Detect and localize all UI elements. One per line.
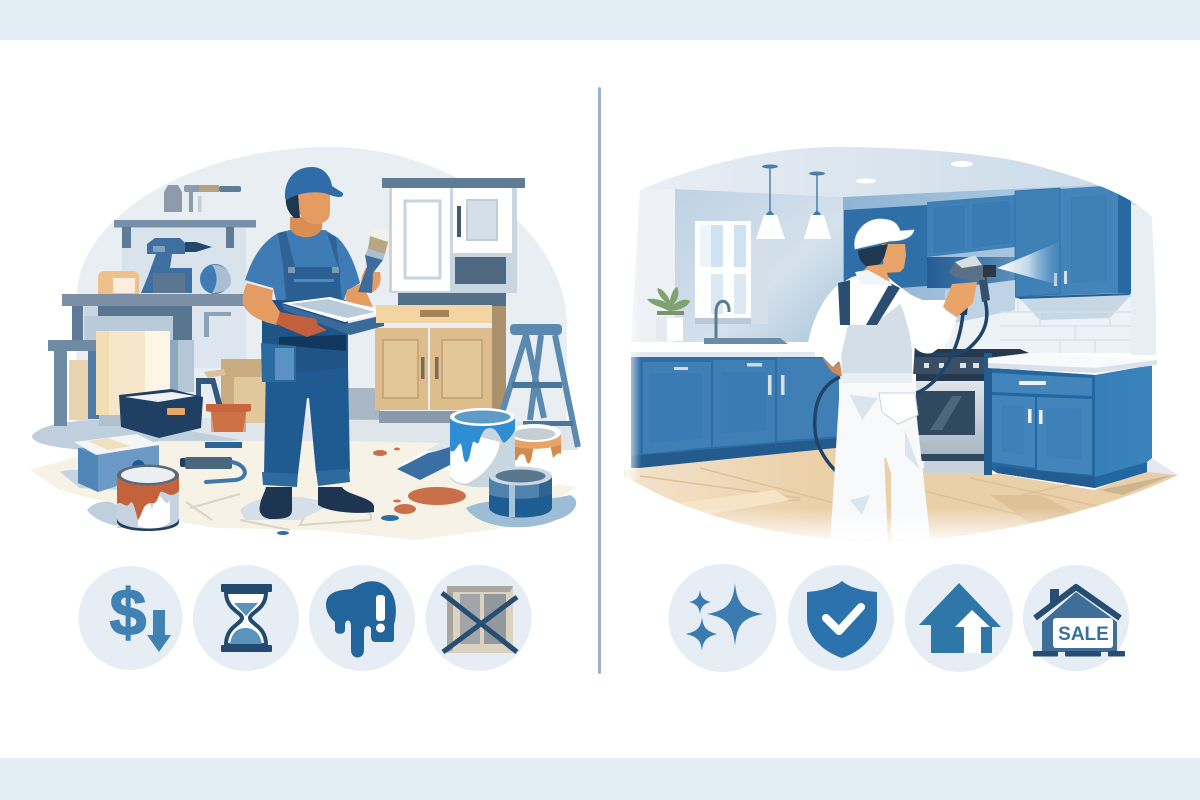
floor paper sheets bbox=[30, 441, 576, 540]
painter legs bbox=[830, 400, 930, 541]
roller and stick bbox=[180, 442, 245, 482]
icon: house for sale bbox=[1023, 565, 1129, 671]
right countertop bbox=[988, 353, 1157, 373]
tan lower cabinet bbox=[375, 305, 506, 423]
floor scraper bbox=[397, 447, 450, 480]
wall base trim bbox=[1147, 458, 1175, 475]
stove and oven bbox=[913, 349, 1029, 475]
pants shading bbox=[850, 395, 920, 515]
icon: house for sale: SALE bbox=[1058, 624, 1109, 645]
left arm bbox=[808, 277, 852, 367]
bib panel bbox=[840, 300, 912, 373]
shelf with drill bbox=[98, 220, 256, 294]
bottom band bbox=[0, 758, 1200, 800]
plant bbox=[647, 287, 690, 341]
backsplash tiles bbox=[945, 205, 1156, 355]
center divider bbox=[598, 87, 601, 674]
icon: shield check bbox=[788, 565, 894, 671]
spray gun bbox=[943, 255, 996, 317]
red paint can bbox=[117, 464, 179, 531]
icon: crossed out cabinet bbox=[426, 565, 532, 671]
back wall bbox=[675, 189, 843, 345]
right arm bbox=[900, 294, 957, 354]
icon: lower cost bbox=[78, 566, 182, 670]
floor bbox=[624, 448, 1178, 541]
recessed lights bbox=[856, 161, 973, 184]
edge fade bbox=[625, 324, 1076, 541]
upper white cabinet bbox=[382, 178, 525, 306]
tape roll can bbox=[489, 466, 552, 518]
cap bbox=[855, 219, 914, 249]
painter in white suit bbox=[808, 219, 957, 545]
spray fan bbox=[997, 242, 1059, 285]
left countertop bbox=[631, 338, 815, 357]
icon: lower cost: $ bbox=[110, 575, 146, 649]
paint spills bbox=[277, 448, 466, 535]
worker arms bbox=[243, 267, 381, 325]
gloved hand bbox=[276, 312, 327, 337]
cardboard box and pot bbox=[196, 359, 266, 432]
left hand bbox=[822, 358, 842, 377]
paint tray bbox=[282, 297, 387, 335]
far left wall bbox=[631, 189, 675, 342]
harness straps bbox=[838, 280, 900, 325]
worker legs bbox=[260, 367, 374, 519]
right wall bbox=[843, 185, 1152, 300]
icon: home value up bbox=[905, 564, 1013, 672]
wall tools bbox=[164, 185, 241, 212]
stool and cream boards bbox=[48, 331, 170, 426]
left base cabinets bbox=[631, 357, 839, 468]
right base cabinets bbox=[992, 365, 1152, 488]
workshop background bbox=[32, 147, 578, 452]
panel: professional spraying kitchen bbox=[620, 140, 1180, 560]
panel: DIY cabinet painting mess bbox=[30, 147, 578, 540]
pants pocket bbox=[879, 393, 918, 424]
pendant lamps bbox=[756, 164, 831, 239]
dark storage box bbox=[119, 389, 203, 438]
workbench bbox=[62, 294, 246, 410]
waist band bbox=[842, 373, 912, 383]
painter hose bbox=[815, 300, 987, 473]
icon: paint drip warning bbox=[309, 565, 415, 671]
worker torso bbox=[245, 230, 360, 382]
blue supply box bbox=[74, 434, 159, 492]
worker in overalls bbox=[243, 167, 392, 519]
orange paint can bbox=[508, 424, 561, 488]
faucet bbox=[716, 301, 729, 340]
icon: hourglass bbox=[193, 565, 299, 671]
head bbox=[882, 244, 906, 273]
upper cabinets bbox=[844, 185, 1131, 299]
window bbox=[695, 221, 768, 324]
painter torso bbox=[850, 276, 915, 374]
blue paint can bbox=[450, 408, 515, 487]
paint brush bbox=[358, 227, 392, 293]
icon: sparkles bbox=[668, 564, 776, 672]
kitchen room bbox=[620, 140, 1180, 560]
worker head and cap bbox=[285, 167, 343, 237]
top band bbox=[0, 0, 1200, 40]
step ladder bbox=[503, 324, 578, 447]
ceiling bbox=[643, 147, 1147, 212]
